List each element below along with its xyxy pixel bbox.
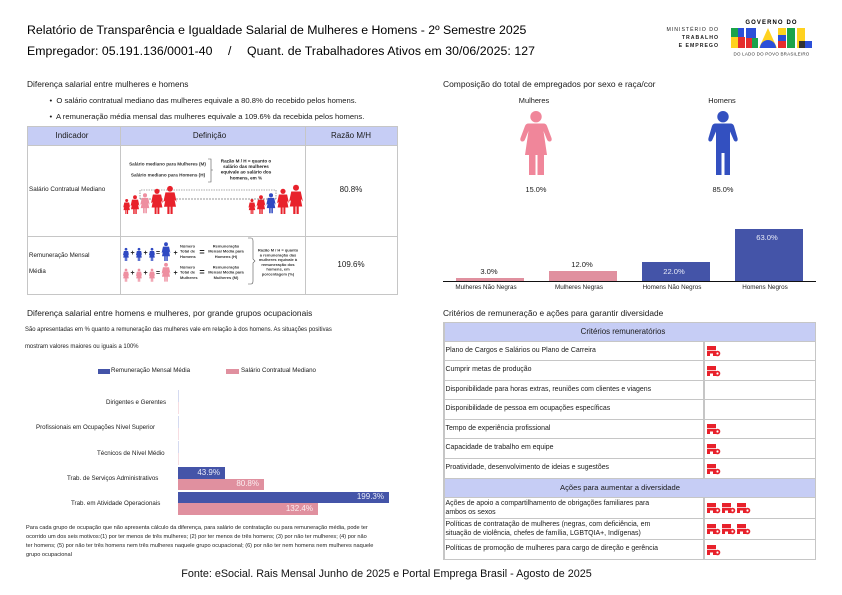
panel: criteria table: Critérios remuneratórios [581,327,665,336]
legend: Remuneração Mensal Média [111,367,190,374]
chart: occupational bars: 43.9% [197,468,220,477]
diagram: mean remuneration: Homens (H) [215,254,238,259]
chart: occupational bars: 199.3% [357,492,384,501]
chart: occupational bars: Trab. de Serviços Administrativos [67,475,158,482]
heading: composition: Composição do total de empregados por sexo e raça/cor [443,79,655,89]
diagram: median salary: equivale ao salário dos [221,170,272,174]
diagram: mean remuneration: Homens [180,254,197,259]
diagram: mean remuneration: Número [180,264,196,270]
description text: São apresentadas em % quanto a remuneração das mulheres vale em relação à dos homens. As situações positivas [25,327,332,333]
diagram: mean remuneration: = [199,267,205,277]
diagram: median salary: Salário mediano para Mulheres (M) [129,162,206,166]
panel: criteria table: Disponibilidade de pessoa em ocupações específicas [446,405,610,412]
panel: criteria table: Ações de apoio a compartilhamento de obrigações familiares para [446,500,649,506]
legend [98,367,316,374]
diagram: mean remuneration: remuneração dos [261,262,295,267]
legend: Salário Contratual Mediano [241,367,316,374]
diagram: mean remuneration [122,238,299,284]
panel: indicator table: Indicador [56,131,88,140]
diagram: median salary [123,158,303,214]
chart: race and sex bars: 3.0% [480,267,498,276]
panel: criteria table: Cumprir metas de produção [446,366,532,373]
footnote [26,525,374,558]
description text [25,326,332,350]
footnote: ter homens; (5) por não ter três homens nem três mulheres naquele grupo ocupacional; (6) por não ter nem homens nem mulheres naquele [26,543,373,549]
diagram: mean remuneration: Razão M / H = quanto [258,248,299,252]
diagram: mean remuneration: Remuneração [213,244,240,248]
panel: indicator table: Definição [193,131,226,140]
panel: criteria table [443,322,816,560]
icon: man [708,111,738,175]
employer line: Empregador: 05.191.136/0001-40 [27,44,212,58]
diagram: mean remuneration: + [130,250,135,257]
panel: indicator table: 80.8% [340,185,362,194]
panel: criteria table: Políticas de contratação de mulheres (negras, com deficiência, em [446,521,650,528]
chart: race and sex bars: 12.0% [571,260,593,268]
footnote: grupo ocupacional [26,552,72,558]
diagram: mean remuneration: Mensal Média para [208,248,245,254]
chart: race and sex bars: 22.0% [663,267,685,276]
logo: ministry: MINISTÉRIO DO [667,27,719,33]
footnote: ocorrido um dos seis motivos:(1) por ter menos de três mulheres; (2) por ter menos de três homens; (3) por não ter mulheres; (4) por não [26,534,367,540]
heading: salary difference: Diferença salarial entre mulheres e homens [27,79,188,89]
icons: criteria checks [707,346,750,556]
value: men: 85.0% [713,185,733,194]
chart: race and sex bars: Homens Não Negros [643,284,701,291]
source: Fonte: eSocial. Rais Mensal Junho de 2025 e Portal Emprega Brasil - Agosto de 2025 [181,568,592,580]
title: Relatório de Transparência e Igualdade Salarial de Mulheres e Homens - 2º Semestre 2025 [27,23,526,37]
logo: ministry: TRABALHO [682,35,719,41]
employer line: / [228,44,231,58]
chart: occupational bars: 80.8% [236,479,259,488]
panel: indicator table: 109.6% [337,260,365,269]
employer line [27,44,535,58]
panel: criteria table: Ações para aumentar a diversidade [560,483,680,492]
icon: woman [520,111,552,175]
diagram: mean remuneration: + [173,250,178,257]
employer line: Quant. de Trabalhadores Ativos em 30/06/2025: 127 [247,44,535,58]
table header [27,126,398,146]
diagram: mean remuneration: mulheres equivale à [259,257,298,262]
logo: governo do brasil: GOVERNO DO [745,20,798,26]
panel: indicator table: Salário Contratual Mediano [29,186,105,193]
chart: occupational bars: Dirigentes e Gerentes [106,398,166,406]
logo: governo do brasil [731,20,812,56]
chart: occupational bars: Técnicos de Nível Médio [97,450,165,456]
panel: criteria table: Plano de Cargos e Salários ou Plano de Carreira [446,347,596,354]
diagram: mean remuneration: Remuneração [213,264,240,270]
bullet 2: • A remuneração média mensal das mulheres equivale a 109.6% da recebida pelos homens. [50,112,364,121]
diagram: mean remuneration: homens, em [266,267,290,272]
value: women: 15.0% [526,185,546,194]
description text: mostram valores maiores ou iguais a 100% [25,344,139,350]
diagram: mean remuneration: + [143,270,148,277]
label: women: Mulheres [519,96,549,105]
chart: race and sex bars [443,229,816,291]
panel: indicator table: Remuneração Mensal [29,252,90,259]
diagram: mean remuneration: porcentagem (%) [262,272,295,276]
diagram: mean remuneration: Mensal Média para [208,270,245,274]
chart: race and sex bars: Homens Negros [742,284,788,291]
diagram: mean remuneration: Total de [180,270,196,274]
diagram: mean remuneration: a remuneração das [260,252,297,257]
panel: criteria table: Políticas de promoção de mulheres para cargo de direção e gerência [446,544,658,552]
chart: race and sex bars: Mulheres Negras [555,284,603,291]
diagram: mean remuneration: = [156,250,160,257]
diagram: median salary: homens, em % [230,176,262,180]
panel: indicator table: Razão M/H [331,131,371,140]
label: men: Homens [708,96,736,105]
panel: indicator table: Média [29,268,46,275]
diagram: median salary: Salário mediano para Homens (H) [131,172,206,178]
diagram: mean remuneration: Total de [180,248,196,254]
diagram: mean remuneration: + [143,250,148,257]
panel: criteria table: Tempo de experiência profissional [446,425,550,432]
chart: occupational bars: Trab. em Atividade Operacionais [71,500,160,507]
heading: occupational groups: Diferença salarial entre homens e mulheres, por grande grupos ocupacionais [27,308,312,318]
diagram: median salary: Razão M / H = quanto o [221,158,271,164]
diagram: mean remuneration: + [130,270,135,277]
diagram: mean remuneration: = [156,270,160,277]
panel: criteria table: situação de violência, chefes de família, LGBTQIA+, Indígenas) [446,530,641,537]
logo: governo do brasil: DO LADO DO POVO BRASILEIRO [734,52,810,56]
diagram: mean remuneration: Número [180,244,196,248]
panel: criteria table: Capacidade de trabalho em equipe [446,444,554,451]
diagram: median salary: salário das mulheres [223,164,269,169]
panel: indicator table [27,126,398,295]
diagram: mean remuneration: Mulheres [180,275,198,280]
panel: criteria table: Proatividade, desenvolvimento de ideias e sugestões [446,464,609,471]
chart: race and sex bars: 63.0% [756,232,778,242]
chart: occupational bars: 132.4% [286,504,313,513]
diagram: mean remuneration: Mulheres (M) [214,275,239,280]
chart: occupational bars [36,367,389,515]
bullet 1: • O salário contratual mediano das mulheres equivale a 80.8% do recebido pelos homens. [50,96,357,105]
panel: criteria table: ambos os sexos [446,508,496,516]
logo: ministry: E EMPREGO [679,43,719,49]
diagram: mean remuneration: + [173,270,178,277]
logo: ministry [666,26,719,49]
footnote: Para cada grupo de ocupação que não apresenta cálculo da diferença, para salário de contratação ou para remuneração média, pode ter [26,525,368,531]
diagram: mean remuneration: = [199,247,205,257]
chart: occupational bars: Profissionais em Ocupações Nível Superior [36,424,155,431]
panel: criteria table: Disponibilidade para horas extras, reuniões com clientes e viagens [446,386,651,393]
chart: race and sex bars: Mulheres Não Negras [455,284,517,291]
heading: criteria: Critérios de remuneração e ações para garantir diversidade [443,308,663,318]
